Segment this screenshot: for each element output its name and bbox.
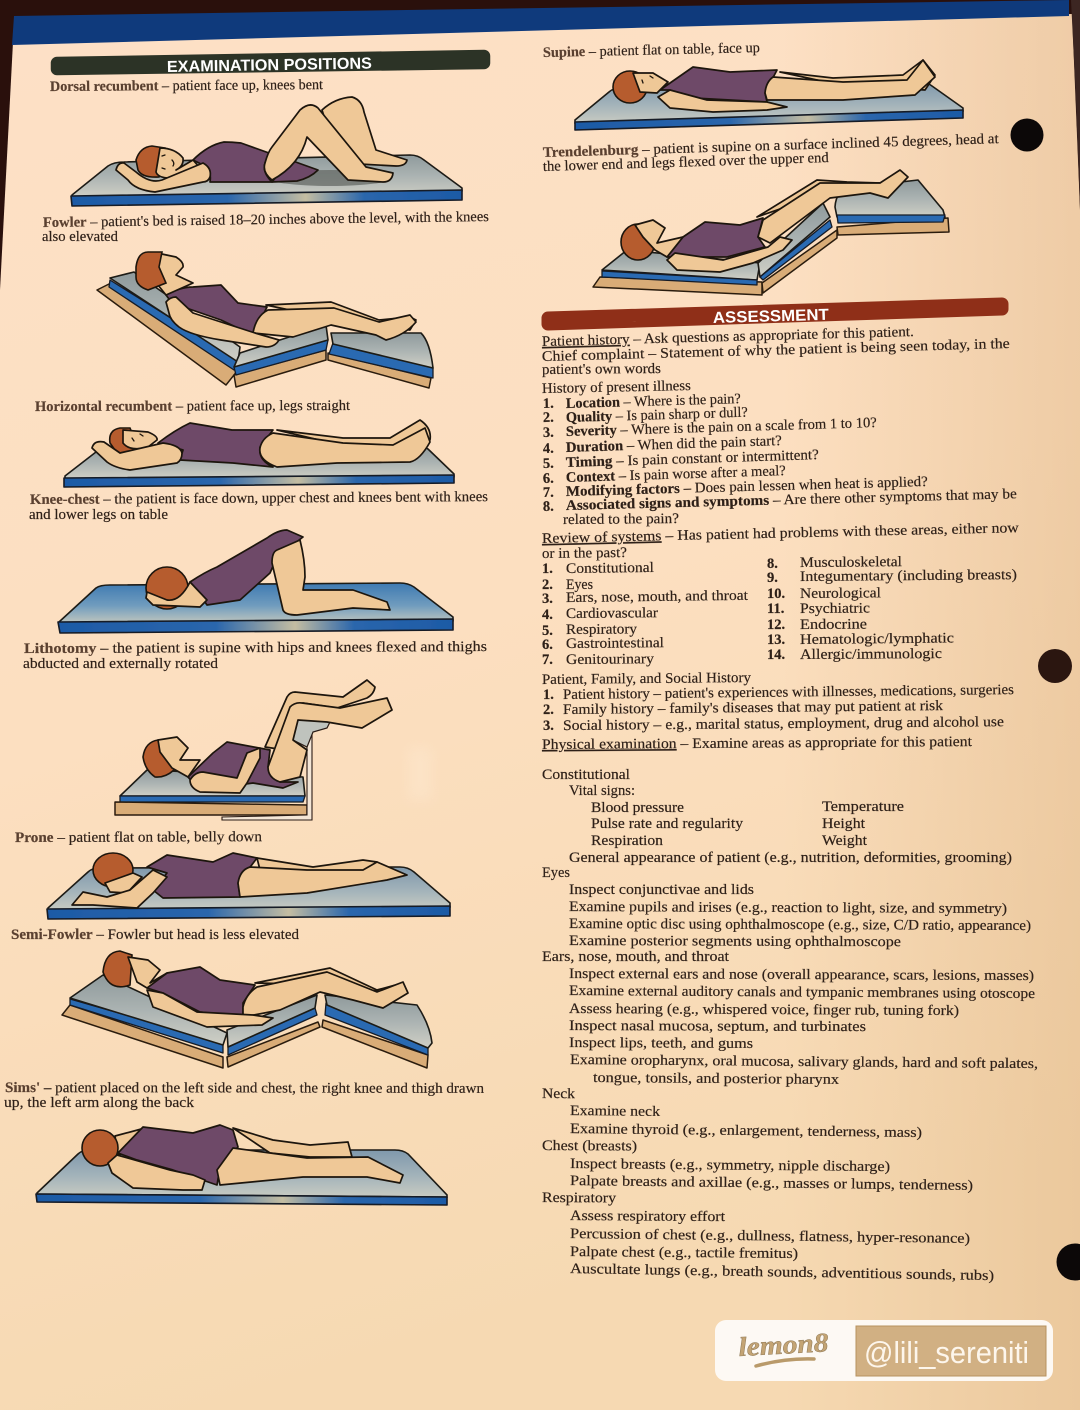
- list: systems 8 to 14: 10.: [767, 586, 785, 602]
- text: neck: [542, 1086, 922, 1141]
- text: patient history: Chief complaint – Statement of why the patient is being seen today, in the: [542, 336, 1010, 365]
- text: ears nose mouth throat: Inspect nasal mucosa, septum, and turbinates: [569, 1018, 866, 1035]
- text: eyes: Examine posterior segments using ophthalmoscope: [569, 933, 901, 950]
- text: constitutional: Height: [822, 816, 865, 832]
- text: respiratory: Percussion of chest (e.g., dullness, flatness, hyper-resonance): [570, 1226, 970, 1247]
- text: patient family social history: 1.: [543, 687, 554, 703]
- list: systems 1 to 7: Genitourinary: [566, 651, 655, 668]
- text: lithotomy: Lithotomy – the patient is supine with hips and knees flexed and thighs: [24, 639, 487, 657]
- text: ears nose mouth throat: Assess hearing (e.g., whispered voice, finger rub, tuning fork): [569, 1001, 959, 1019]
- text: history of present illness: Context – Is pain worse after a meal?: [566, 463, 786, 486]
- text: dorsal recumbent: Dorsal recumbent – patient face up, knees bent: [50, 77, 323, 95]
- list: systems 1 to 7: 2.: [542, 577, 553, 593]
- text: sims: [4, 1080, 485, 1111]
- text: history of present illness: Quality – Is pain sharp or dull?: [566, 405, 748, 426]
- list: systems 8 to 14: 12.: [767, 617, 785, 633]
- text: review of systems: Review of systems – Has patient had problems with these areas, either now: [542, 520, 1020, 547]
- text: review of systems: [542, 520, 1020, 562]
- list: systems 8 to 14: [767, 554, 1017, 663]
- text: chest: Inspect breasts (e.g., symmetry, nipple discharge): [570, 1156, 890, 1175]
- figure: dorsal recumbent: [71, 97, 462, 206]
- text: respiratory: Respiratory: [542, 1190, 617, 1206]
- text: sims: Sims' – patient placed on the left side and chest, the right knee and thigh drawn: [5, 1080, 485, 1097]
- text: history of present illness: related to the pain?: [563, 511, 679, 528]
- text: eyes: Examine optic disc using ophthalmoscope (e.g., size, C/D ratio, appearance): [569, 916, 1031, 934]
- list: systems 8 to 14: 11.: [767, 601, 784, 617]
- text: chest: Palpate breasts and axillae (e.g., masses or lumps, tenderness): [570, 1173, 973, 1194]
- text: history of present illness: 3.: [543, 425, 554, 441]
- list: systems 8 to 14: Psychiatric: [800, 601, 870, 617]
- figure: horizontal recumbent: [64, 420, 454, 487]
- figure: sims: [36, 1125, 447, 1205]
- text: history of present illness: Timing – Is pain constant or intermittent?: [566, 447, 819, 471]
- text: patient history: [542, 324, 1010, 378]
- figure: lithotomy: [115, 680, 392, 820]
- text: neck: Examine neck: [570, 1103, 661, 1120]
- figure: supine: [575, 60, 963, 130]
- text: patient family social history: Social history – e.g., marital status, employment, drug and alcohol use: [563, 714, 1004, 734]
- figure: semi-fowler: [62, 951, 432, 1068]
- list: systems 8 to 14: 14.: [767, 647, 785, 663]
- text: trendelenburg: Trendelenburg – patient is supine on a surface inclined 45 degrees, head at: [543, 131, 999, 161]
- text: history of present illness: 7.: [543, 485, 554, 501]
- text: eyes: [542, 865, 1031, 950]
- list: systems 1 to 7: Ears, nose, mouth, and throat: [566, 588, 748, 606]
- list: systems 1 to 7: 1.: [542, 561, 553, 577]
- text: history of present illness: 6.: [543, 471, 554, 487]
- text: respiratory: Palpate chest (e.g., tactile fremitus): [570, 1244, 798, 1262]
- text: eyes: Inspect conjunctivae and lids: [569, 882, 754, 898]
- text: fowler: also elevated: [42, 229, 119, 245]
- text: patient history: patient's own words: [542, 361, 661, 378]
- list: systems 1 to 7: 7.: [542, 652, 553, 668]
- text: history of present illness: Modifying factors – Does pain lessen when heat is applied?: [566, 474, 928, 500]
- heading: examination positions: [57, 55, 484, 76]
- text: trendelenburg: the lower end and legs flexed over the upper end: [543, 150, 830, 175]
- figure: knee-chest: [58, 530, 453, 633]
- figure: fowler: [97, 252, 433, 388]
- text: sims: up, the left arm along the back: [4, 1095, 195, 1111]
- text: constitutional: General appearance of patient (e.g., nutrition, deformities, grooming): [569, 850, 1012, 866]
- binder hole: bottom: [1056, 1244, 1080, 1280]
- text: patient family social history: [542, 670, 1014, 734]
- text: patient family social history: Family history – family's diseases that may put patient at risk: [563, 698, 944, 718]
- text: knee-chest: and lower legs on table: [29, 507, 168, 523]
- list: systems 1 to 7: Respiratory: [566, 621, 638, 638]
- text: physical examination: Physical examination – Examine areas as appropriate for this patient: [542, 734, 972, 753]
- list: systems 1 to 7: 6.: [542, 637, 553, 653]
- list: systems 8 to 14: Integumentary (including breasts): [800, 567, 1017, 585]
- text: ears nose mouth throat: Inspect lips, teeth, and gums: [569, 1035, 753, 1052]
- text: history of present illness: 8.: [543, 499, 554, 515]
- text: neck: Examine thyroid (e.g., enlargement, tenderness, mass): [570, 1121, 922, 1141]
- text: constitutional: Temperature: [822, 799, 904, 815]
- text: patient family social history: 2.: [543, 702, 554, 718]
- heading: assessment: ASSESSMENT: [713, 307, 829, 327]
- text: patient family social history: Patient, Family, and Social History: [542, 670, 752, 688]
- text: prone: Prone – patient flat on table, belly down: [15, 829, 263, 846]
- list: systems 1 to 7: 5.: [542, 623, 553, 639]
- text: history of present illness: 1.: [543, 396, 554, 412]
- text: constitutional: Pulse rate and regularity: [591, 816, 744, 832]
- text: history of present illness: 5.: [543, 456, 554, 472]
- text: chest: [542, 1138, 973, 1194]
- text: history of present illness: Severity – Where is the pain on a scale from 1 to 10?: [566, 415, 877, 440]
- text: trendelenburg: [543, 131, 999, 175]
- figure: prone: [47, 853, 450, 919]
- text: patient history: Patient history – Ask questions as appropriate for this patient.: [542, 324, 914, 350]
- text: constitutional: Weight: [822, 833, 867, 849]
- list: systems 8 to 14: 13.: [767, 632, 785, 648]
- text: review of systems: or in the past?: [542, 545, 627, 562]
- text: constitutional: [542, 767, 1012, 866]
- list: systems 8 to 14: Hematologic/lymphatic: [800, 630, 954, 648]
- text: fowler: [42, 209, 489, 245]
- text: respiratory: Auscultate lungs (e.g., breath sounds, adventitious sounds, rubs): [570, 1261, 994, 1284]
- text: eyes: Eyes: [542, 865, 570, 881]
- text: patient family social history: Patient history – patient's experiences with illnesses, medications, surgeries: [563, 682, 1014, 703]
- text: constitutional: Respiration: [591, 833, 664, 849]
- list: systems 1 to 7: 3.: [542, 591, 553, 607]
- text: history of present illness: History of present illness: [542, 378, 691, 397]
- list: systems 1 to 7: Gastrointestinal: [566, 635, 664, 652]
- text: knee-chest: Knee-chest – the patient is face down, upper chest and knees bent with knees: [30, 489, 488, 508]
- text: ears nose mouth throat: tongue, tonsils, and posterior pharynx: [593, 1070, 840, 1088]
- watermark: lemon8 handle: lemon8: [738, 1327, 830, 1362]
- text: history of present illness: Duration – When did the pain start?: [566, 433, 782, 456]
- text: history of present illness: 2.: [543, 410, 554, 426]
- list: systems 8 to 14: 8.: [767, 556, 778, 572]
- watermark: lemon8 handle: [715, 1320, 1053, 1381]
- figure: trendelenburg: [593, 170, 949, 295]
- text: lithotomy: abducted and externally rotated: [23, 656, 219, 672]
- text: horizontal recumbent: Horizontal recumbent – patient face up, legs straight: [35, 398, 350, 415]
- text: supine: Supine – patient flat on table, face up: [543, 40, 760, 61]
- list: systems 8 to 14: Neurological: [800, 585, 881, 602]
- list: systems 1 to 7: Eyes: [566, 577, 593, 593]
- list: systems 1 to 7: 4.: [542, 607, 553, 623]
- text: history of present illness: Associated signs and symptoms – Are there other symptoms that may be: [566, 486, 1017, 514]
- text: chest: Chest (breasts): [542, 1138, 637, 1154]
- text: ears nose mouth throat: [542, 949, 1038, 1088]
- text: lithotomy: [23, 639, 487, 672]
- text: constitutional: Vital signs:: [569, 783, 635, 799]
- watermark: lemon8 handle: @lili_sereniti: [864, 1335, 1029, 1370]
- text: ears nose mouth throat: Inspect external ears and nose (overall appearance, scars, lesions, masses): [569, 966, 1034, 984]
- text: semi-fowler: Semi-Fowler – Fowler but head is less elevated: [11, 927, 300, 943]
- list: systems 8 to 14: Endocrine: [800, 617, 867, 633]
- text: fowler: Fowler – patient's bed is raised 18–20 inches above the level, with the knees: [43, 209, 489, 231]
- text: patient family social history: 3.: [543, 718, 554, 734]
- list: systems 8 to 14: Allergic/immunologic: [800, 646, 942, 663]
- text: ears nose mouth throat: Ears, nose, mouth, and throat: [542, 949, 729, 965]
- text: ears nose mouth throat: Examine oropharynx, oral mucosa, salivary glands, hard and soft palates,: [570, 1052, 1038, 1072]
- list: systems 1 to 7: Cardiovascular: [566, 605, 658, 622]
- binder hole: top: [1010, 118, 1044, 152]
- text: history of present illness: Location – Where is the pain?: [566, 391, 741, 412]
- text: eyes: Examine pupils and irises (e.g., reaction to light, size, and symmetry): [569, 899, 1007, 917]
- binder hole: middle: [1038, 649, 1072, 683]
- text: history of present illness: 4.: [543, 441, 554, 457]
- text: respiratory: Assess respiratory effort: [570, 1208, 725, 1225]
- text: history of present illness: [542, 378, 1017, 528]
- list: systems 8 to 14: 9.: [767, 570, 778, 586]
- heading: examination positions: EXAMINATION POSITIONS: [167, 55, 372, 76]
- text: constitutional: Constitutional: [542, 767, 630, 783]
- text: neck: Neck: [542, 1086, 576, 1102]
- text: knee-chest: [29, 489, 488, 523]
- list: systems 8 to 14: Musculoskeletal: [800, 554, 902, 571]
- list: systems 1 to 7: [542, 560, 748, 668]
- text: ears nose mouth throat: Examine external auditory canals and tympanic membranes using otoscope: [569, 983, 1035, 1002]
- text: respiratory: [542, 1190, 994, 1284]
- text: constitutional: Blood pressure: [591, 800, 684, 816]
- list: systems 1 to 7: Constitutional: [566, 560, 654, 577]
- heading: assessment: [548, 304, 1002, 327]
